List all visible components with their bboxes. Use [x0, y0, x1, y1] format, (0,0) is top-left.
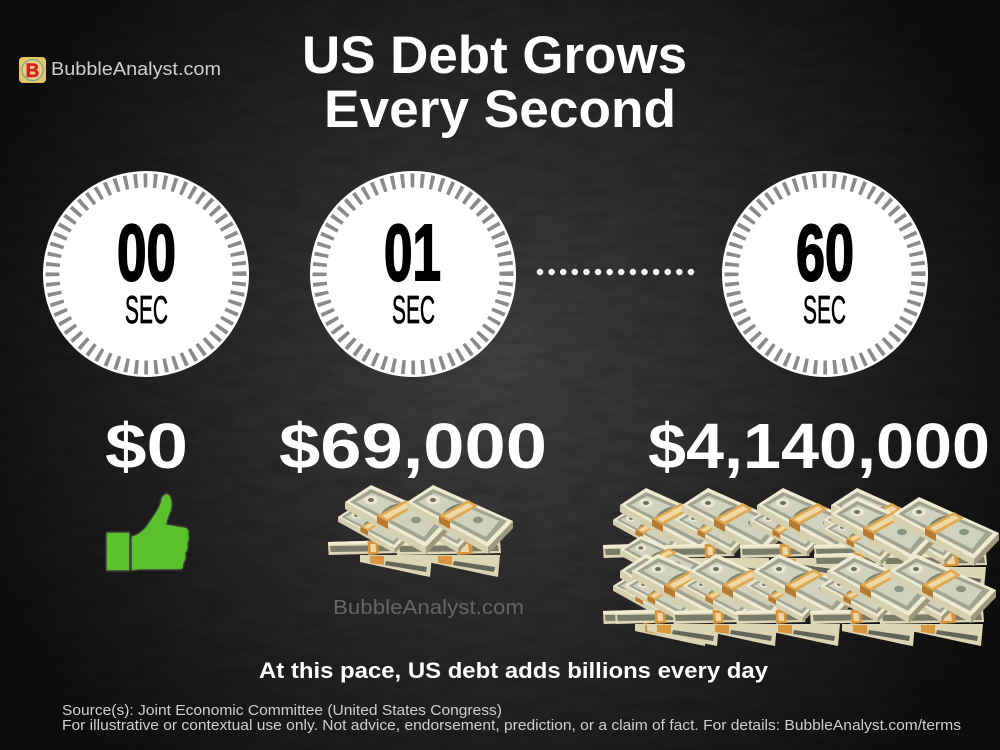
title: US Debt Grows [302, 26, 687, 85]
logo: BubbleAnalyst [19, 57, 221, 83]
clock: 60 sec: 60 [796, 208, 854, 297]
clock: 00 sec: 00 [117, 208, 176, 297]
source and disclaimer: Source(s): Joint Economic Committee (United States Congress) [62, 703, 502, 719]
icon: large money pile [603, 488, 999, 646]
source and disclaimer: For illustrative or contextual use only. Not advice, endorsement, prediction, or a claim of fact. For details: BubbleAnalyst.com/terms [62, 718, 961, 734]
title: Every Second [324, 80, 676, 139]
clock: 01 sec: 01 [384, 208, 441, 297]
clock: 00 sec: SEC [125, 289, 168, 332]
watermark: BubbleAnalyst.com [333, 597, 524, 619]
amount: $0: $0 [105, 410, 188, 482]
amount: $4,140,000: $4,140,000 [648, 410, 990, 482]
logo: BubbleAnalyst: BubbleAnalyst.com [51, 59, 221, 79]
logo: BubbleAnalyst: B [26, 61, 39, 82]
icon: small money pile [328, 485, 513, 577]
source and disclaimer [62, 703, 961, 734]
clock: 01 sec [310, 171, 516, 377]
takeaway line: At this pace, US debt adds billions every day [259, 658, 769, 683]
clock: 60 sec [722, 171, 928, 377]
icon: thumbs up [106, 494, 189, 571]
clock: 60 sec: SEC [803, 289, 846, 332]
dotted connector [540, 269, 691, 275]
clock: 00 sec [43, 171, 249, 377]
clock: 01 sec: SEC [392, 289, 435, 332]
title [302, 26, 687, 139]
amount: $69,000: $69,000 [279, 410, 547, 482]
